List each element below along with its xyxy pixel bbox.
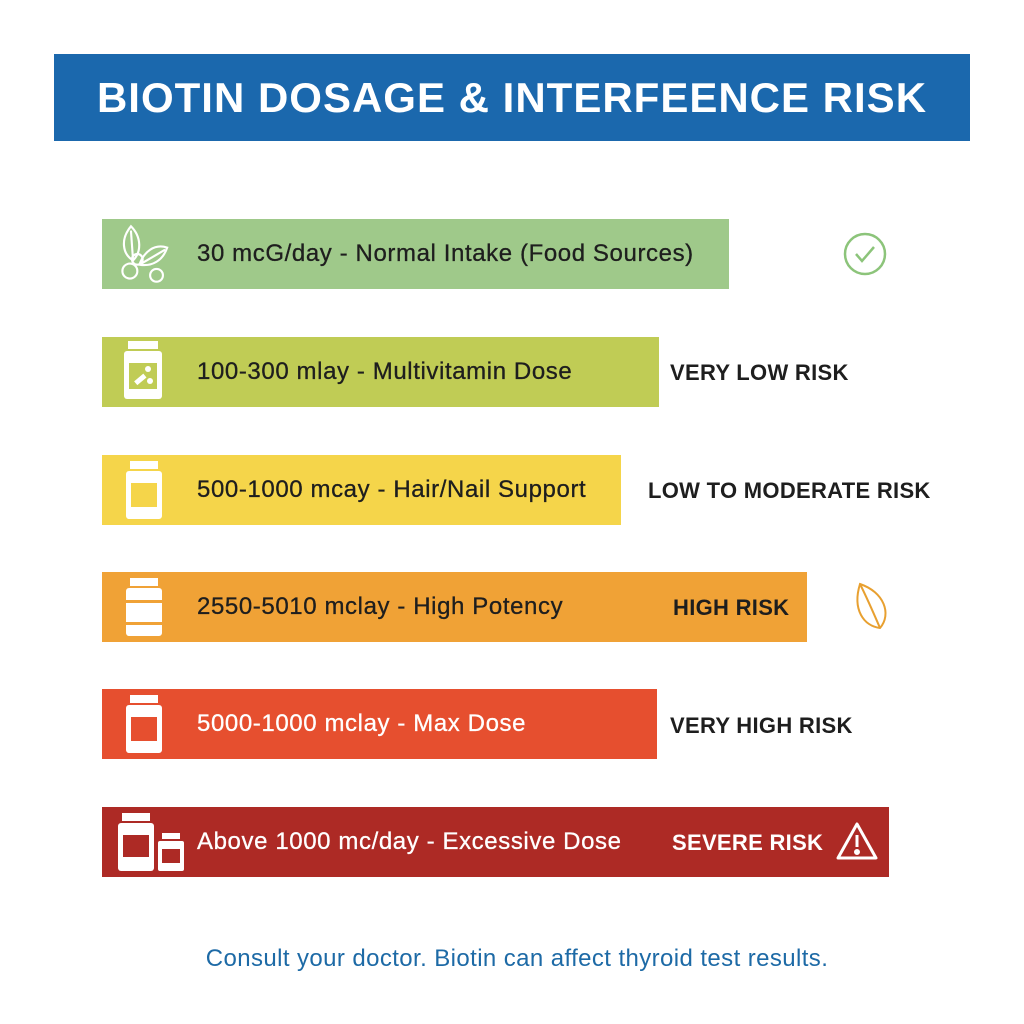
bar: max dose bbox=[102, 689, 657, 759]
label: severe risk: SEVERE RISK bbox=[672, 830, 823, 855]
icon: two bottles bbox=[118, 813, 184, 871]
icon: bottle bbox=[126, 578, 162, 636]
bar: multivitamin: 100-300 mlay - Multivitamin Dose bbox=[197, 358, 572, 385]
bar: hair/nail: 500-1000 mcay - Hair/Nail Support bbox=[197, 476, 586, 503]
footer note: Consult your doctor. Biotin can affect thyroid test results. bbox=[206, 945, 828, 972]
icon: bottle bbox=[126, 461, 162, 519]
label: low to moderate risk: LOW TO MODERATE RISK bbox=[648, 478, 931, 503]
bar: excessive: Above 1000 mc/day - Excessive Dose bbox=[197, 828, 622, 855]
icon: bottle with pills bbox=[124, 341, 162, 399]
icon: warning bbox=[836, 822, 878, 860]
label: high risk: HIGH RISK bbox=[673, 595, 789, 620]
bar: high potency bbox=[102, 572, 807, 642]
icon: leaf bbox=[856, 582, 886, 629]
icon: bottle bbox=[126, 695, 162, 753]
bar: high potency: 2550-5010 mclay - High Potency bbox=[197, 593, 563, 620]
title bbox=[54, 54, 970, 141]
label: very high risk: VERY HIGH RISK bbox=[670, 713, 853, 738]
bar: normal intake bbox=[102, 219, 729, 289]
icon: check bbox=[844, 232, 886, 276]
bar: multivitamin bbox=[102, 337, 659, 407]
title: BIOTIN DOSAGE & INTERFEENCE RISK bbox=[97, 74, 927, 120]
bar: hair/nail bbox=[102, 455, 621, 525]
label: very low risk: VERY LOW RISK bbox=[670, 360, 849, 385]
bar: excessive bbox=[102, 807, 889, 877]
bar: max dose: 5000-1000 mclay - Max Dose bbox=[197, 710, 526, 737]
bar: normal intake: 30 mcG/day - Normal Intake (Food Sources) bbox=[197, 240, 694, 267]
icon: leaves and berries bbox=[121, 224, 168, 283]
